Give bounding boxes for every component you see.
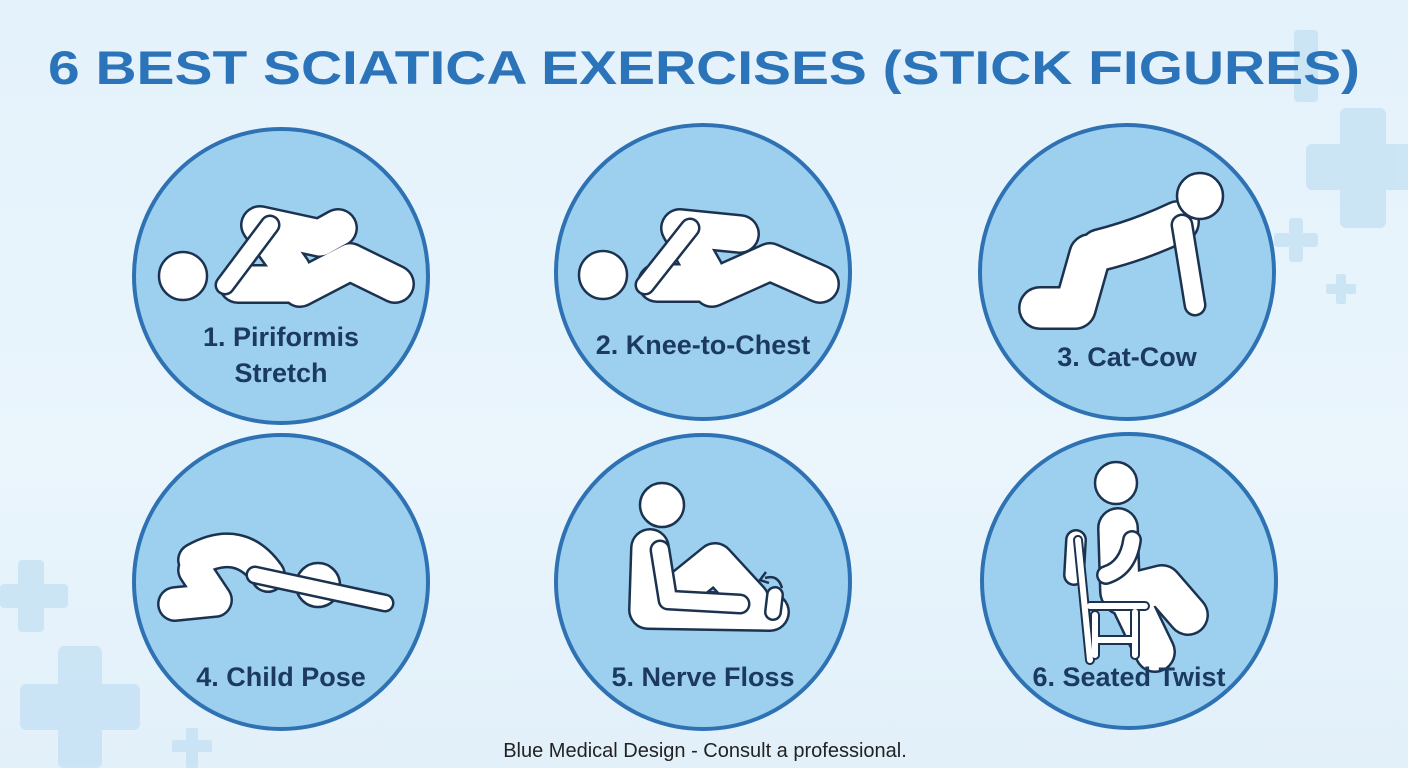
label: 5. Nerve Floss (611, 662, 795, 692)
panel: 2 knee-to-chest (556, 125, 850, 419)
icon: piriformis figure (159, 225, 395, 300)
label: 1. Piriformis (203, 322, 359, 352)
icon: nerve floss figure (640, 483, 782, 612)
label: 2. Knee-to-Chest (596, 330, 810, 360)
label: 3. Cat-Cow (1057, 342, 1198, 372)
icon: seated twist figure (1074, 462, 1188, 660)
label: Stretch (234, 358, 328, 388)
icon: knee to chest figure (579, 228, 820, 299)
panel: 3 cat-cow (980, 125, 1274, 419)
title: 6 BEST SCIATICA EXERCISES (STICK FIGURES) (48, 41, 1360, 94)
arrow: flex (765, 577, 782, 588)
label: 4. Child Pose (196, 662, 366, 692)
icon: cat-cow figure (1040, 173, 1223, 308)
panel: 5 nerve floss (556, 435, 850, 729)
panel: 1 piriformis (134, 129, 428, 423)
icon: child pose figure (175, 550, 385, 607)
panel: 4 child pose (134, 435, 428, 729)
panel: 6 seated twist (982, 434, 1276, 728)
footer: Blue Medical Design - Consult a professional. (503, 740, 907, 762)
icon: chair (1078, 540, 1145, 660)
label: 6. Seated Twist (1032, 662, 1226, 692)
